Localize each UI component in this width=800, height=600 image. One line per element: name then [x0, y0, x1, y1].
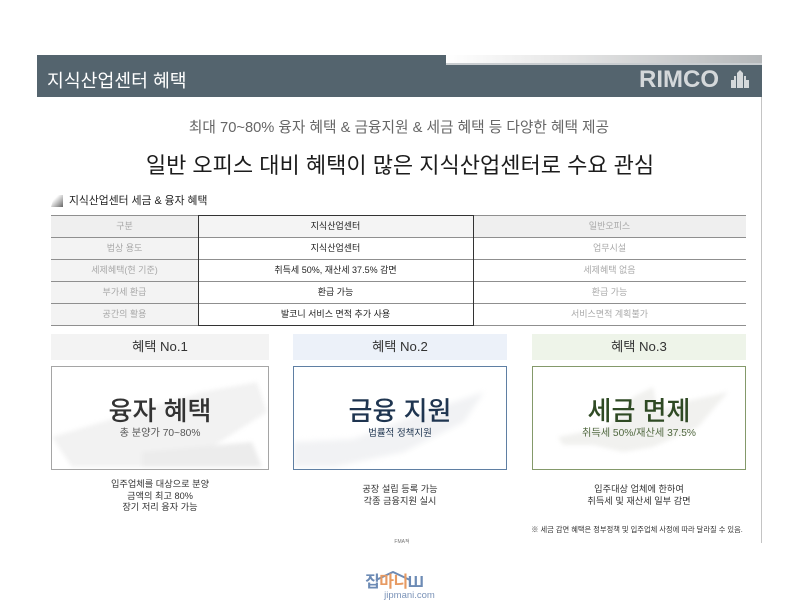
logo roof — [376, 571, 409, 580]
card 1 subtitle: 총 분양가 70~80% — [120, 428, 200, 439]
row: 세제혜택 — [51, 260, 746, 282]
icon: section marker — [51, 195, 63, 207]
card 2 header — [293, 334, 507, 360]
row: 법상 용도: 지식산업센터 — [311, 243, 360, 253]
header title: 지식산업센터 혜택 — [47, 70, 187, 91]
card 1 description — [111, 479, 209, 512]
card 1 description: 장기 저리 융자 가능 — [122, 502, 198, 512]
RIMCO logo: RIMCO — [639, 66, 719, 93]
table header row: 일반오피스 — [589, 221, 630, 231]
main heading: 일반 오피스 대비 혜택이 많은 지식산업센터로 수요 관심 — [146, 153, 654, 178]
table section heading — [51, 194, 207, 207]
logo mark: 집마니Ш — [365, 574, 423, 591]
card 1 description: 금액의 최고 80% — [127, 490, 193, 500]
card 2 description: 각종 금융지원 실시 — [364, 496, 436, 506]
card 3 header: 혜택 No.3 — [611, 339, 667, 354]
right page border — [761, 97, 762, 543]
card 1 header: 혜택 No.1 — [132, 339, 188, 354]
card 1 background image — [54, 384, 266, 468]
card 1 title: 융자 혜택 — [109, 396, 211, 426]
card 3 title: 세금 면제 — [588, 396, 690, 426]
card 3 description: 취득세 및 재산세 일부 감면 — [587, 496, 691, 506]
card 3 description — [587, 484, 691, 506]
row: 부가세 환급 — [51, 282, 746, 304]
highlighted column frame — [198, 215, 474, 326]
jipmani logo — [365, 571, 435, 600]
row: 공간의 활용: 공간의 활용 — [103, 309, 146, 319]
card 2 background image — [295, 396, 478, 466]
row: 법상 용도: 업무시설 — [593, 243, 626, 253]
table header row — [51, 216, 746, 238]
card 2 description: 공장 설립 등록 가능 — [362, 484, 438, 494]
header bar — [37, 55, 762, 97]
card 1 description: 입주업체를 대상으로 분양 — [111, 479, 209, 489]
card 3 background image — [560, 389, 724, 452]
row: 부가세 환급: 환급 가능 — [318, 287, 353, 297]
card 3 box — [532, 366, 746, 470]
card 1 box — [51, 366, 269, 470]
row: 법상 용도: 법상 용도 — [107, 243, 142, 253]
row: 세제혜택: 세제혜택(현 기준) — [91, 265, 158, 275]
comparison table — [51, 215, 746, 326]
card 3 header — [532, 334, 746, 360]
row: 세제혜택: 세제혜택 없음 — [583, 265, 636, 275]
card 1 header — [51, 334, 269, 360]
table header row: 지식산업센터 — [311, 221, 360, 231]
footnote: ※ 세금 감면 혜택은 정부정책 및 입주업체 사정에 따라 달라질 수 있음. — [531, 525, 743, 534]
source note: FMA적 — [394, 539, 410, 545]
row: 공간의 활용: 발코니 서비스 면적 추가 사용 — [281, 309, 390, 319]
row: 공간의 활용: 서비스면적 계획불가 — [571, 309, 648, 319]
section heading text: 지식산업센터 세금 & 융자 혜택 — [69, 195, 207, 207]
row: 부가세 환급: 환급 가능 — [592, 287, 627, 297]
card 2 box — [293, 366, 507, 470]
header top-right notch — [446, 55, 762, 65]
table header row: 구분 — [116, 221, 133, 231]
card 3 description: 입주대상 업체에 한하여 — [594, 484, 684, 494]
subtitle: 최대 70~80% 융자 혜택 & 금융지원 & 세금 혜택 등 다양한 혜택 제공 — [189, 120, 609, 136]
card 3 subtitle: 취득세 50%/재산세 37.5% — [582, 428, 696, 439]
card 2 title: 금융 지원 — [349, 396, 451, 426]
row: 세제혜택: 취득세 50%, 재산세 37.5% 감면 — [274, 265, 397, 275]
card 2 subtitle: 법률적 정책지원 — [368, 428, 432, 439]
row: 부가세 환급: 부가세 환급 — [103, 287, 146, 297]
card 2 header: 혜택 No.2 — [372, 339, 428, 354]
card 2 description — [362, 484, 438, 506]
row: 법상 용도 — [51, 238, 746, 260]
row: 공간의 활용 — [51, 304, 746, 326]
